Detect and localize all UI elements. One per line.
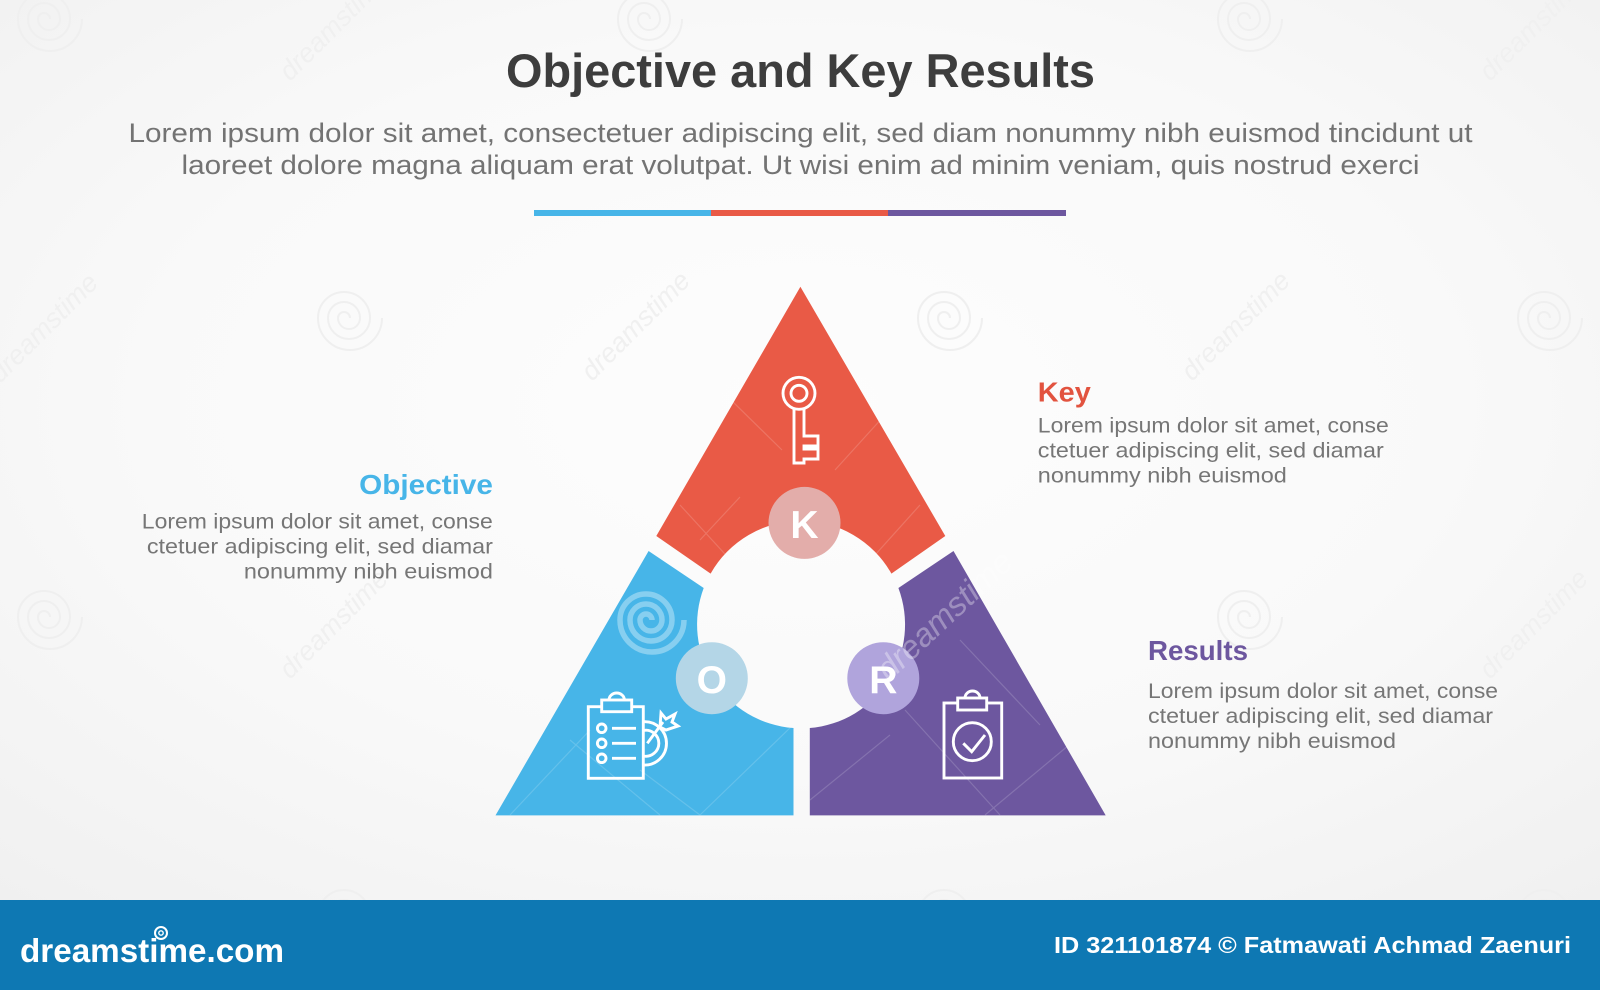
badge: O: O [697,659,727,702]
watermark on segments [510,350,1075,815]
callout: results: Results [1148,635,1248,666]
icon: checklist with target [588,693,678,778]
segment: results [810,551,1106,815]
footer banner [0,900,1600,990]
callout: results [1148,635,1498,753]
callout: key [1038,376,1389,488]
callout: results: Lorem ipsum dolor sit amet, conse [1148,680,1498,703]
watermark pattern: dreamstime [1473,563,1594,684]
callout: objective: Lorem ipsum dolor sit amet, conse [142,510,493,534]
badge: R: R [869,659,897,702]
icon: key [783,377,818,463]
triangle diagram [496,287,1106,815]
callout: objective: ctetuer adipiscing elit, sed diamar [147,536,493,558]
tricolor divider [534,210,1066,216]
callout: results: ctetuer adipiscing elit, sed diamar [1148,705,1493,728]
badge: R [847,642,919,714]
badge: K: K [790,504,819,547]
callout: key: nonummy nibh euismod [1038,464,1287,488]
segment: key [656,287,945,574]
badge: O [676,642,748,714]
icon: clipboard with check [944,691,1002,778]
callout: key: Key [1038,376,1091,408]
watermark pattern: dreamstime [1175,265,1296,386]
callout: objective: nonummy nibh euismod [244,560,493,584]
watermark pattern: dreamstime [575,265,696,386]
dreamstime mark on results: dreamstime [869,542,1020,687]
callout: results: nonummy nibh euismod [1148,730,1396,753]
subtitle [128,118,1473,180]
watermark pattern: dreamstime [273,563,394,684]
subtitle: Lorem ipsum dolor sit amet, consectetuer adipiscing elit, sed diam nonummy nibh euismod tincidunt ut [128,118,1473,148]
image credit: ID 321101874 © Fatmawati Achmad Zaenuri [1054,932,1571,958]
callout: key: ctetuer adipiscing elit, sed diamar [1038,440,1384,462]
logo: dreamstime: dreamstime.com [20,932,284,969]
title: Objective and Key Results [506,44,1095,97]
subtitle: laoreet dolore magna aliquam erat volutpat. Ut wisi enim ad minim veniam, quis nostrud exerci [182,150,1420,180]
callout: objective [142,469,493,584]
callout: key: Lorem ipsum dolor sit amet, conse [1038,414,1389,438]
callout: objective: Objective [359,469,493,500]
badge: K [768,487,840,559]
segment: objective [496,551,794,815]
